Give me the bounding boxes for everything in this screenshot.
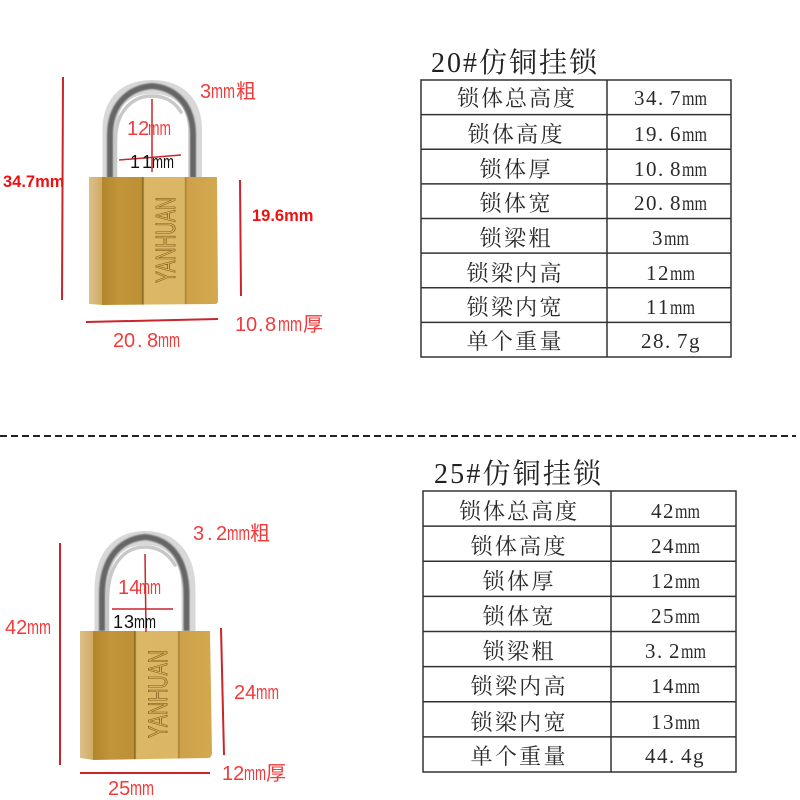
spec table: 20#: mm [682, 157, 707, 181]
body height line [221, 628, 224, 755]
width label: 20.8 [113, 330, 158, 352]
body height label: mm [256, 682, 279, 704]
shackle [102, 537, 188, 631]
thickness label: 10.8 [235, 314, 276, 336]
inner width label: 13 [113, 612, 134, 632]
spec table: 25#: 锁梁粗 [482, 639, 554, 664]
body height label: 24 [234, 682, 256, 704]
section title: 20#: 20#仿铜挂锁 [431, 47, 598, 79]
spec table: 20#: 锁梁粗 [480, 226, 550, 251]
width line [86, 319, 218, 322]
spec table: 20#: 19.6 [634, 122, 680, 146]
shackle [110, 86, 195, 178]
shackle thickness label: 粗 [250, 522, 270, 545]
spec table: 25#: mm [675, 499, 700, 523]
spec table: 20#: mm [670, 295, 695, 319]
inner height label: mm [139, 577, 161, 599]
spec table: 25# [423, 491, 736, 772]
spec table: 25#: 锁梁内宽 [470, 710, 566, 735]
total height label: 34.7mm [3, 173, 64, 191]
spec table: 20#: 3 [652, 226, 662, 250]
spec table: 25#: mm [675, 604, 700, 628]
thickness label: mm [244, 763, 266, 785]
spec table: 25#: mm [681, 639, 706, 663]
spec table: 25#: mm [675, 710, 700, 734]
spec table: 25#: 14 [651, 674, 674, 698]
shackle thickness label: mm [211, 81, 235, 103]
spec table: 20#: 28.7g [641, 329, 700, 353]
spec table: 25#: 25 [651, 604, 674, 628]
spec table: 20#: mm [682, 86, 707, 110]
spec table: 20#: 锁体总高度 [457, 86, 575, 111]
spec table: 25#: 锁体厚 [482, 569, 554, 594]
shackle thickness label: 3.2 [193, 523, 227, 545]
thickness label: 厚 [266, 763, 286, 785]
inner width line [112, 608, 173, 610]
spec table: 20#: 锁梁内高 [466, 261, 562, 286]
spec table: 20#: mm [664, 226, 689, 250]
width label: 25 [108, 778, 130, 800]
spec table: 20#: mm [682, 191, 707, 215]
spec table: 20#: 单个重量 [466, 329, 562, 354]
spec table: 20#: 11 [646, 295, 668, 319]
spec table: 25#: 44.4g [645, 744, 704, 768]
spec table: 25#: 12 [651, 569, 674, 593]
spec table: 20#: 34.7 [634, 86, 680, 110]
shackle thickness label: 粗 [236, 80, 256, 103]
spec table: 25#: 单个重量 [470, 744, 566, 769]
inner height label: 12 [127, 118, 149, 140]
inner width label: mm [152, 152, 174, 172]
spec table: 20#: 锁体厚 [480, 157, 550, 182]
spec table: 25#: 锁梁内高 [470, 674, 566, 699]
inner width line [119, 155, 181, 160]
brand text: YANHUAN [150, 197, 181, 283]
spec table: 25#: 42 [651, 499, 674, 523]
width label: mm [158, 330, 180, 352]
body height line [240, 180, 241, 296]
spec table: 20#: 锁体高度 [468, 122, 562, 147]
spec table: 25#: 13 [651, 710, 674, 734]
spec table: 25#: 锁体高度 [470, 534, 566, 559]
inner height label: mm [148, 118, 171, 140]
spec table: 20#: 20.8 [634, 191, 680, 215]
width line [80, 772, 210, 774]
spec table: 25#: mm [675, 674, 700, 698]
lock body front [93, 631, 212, 760]
width label: mm [130, 778, 154, 800]
brand text: YANHUAN [143, 650, 173, 738]
thickness label: mm [278, 314, 302, 336]
spec table: 20#: mm [682, 122, 707, 146]
lock photo: 20# padlock [89, 86, 218, 305]
dimension annotations: 25# padlock [5, 522, 286, 800]
thickness label: 12 [222, 763, 244, 785]
total height line [62, 77, 63, 300]
spec table: 20#: 10.8 [634, 157, 680, 181]
inner height line [151, 99, 153, 172]
spec table: 25#: 24 [651, 534, 674, 558]
lock body side [89, 177, 103, 305]
lock body side [80, 631, 94, 760]
spec table: 25#: mm [675, 534, 700, 558]
spec table: 25#: 3.2 [645, 639, 680, 663]
dimension annotations: 20# padlock [3, 77, 323, 352]
shackle thickness label: mm [227, 523, 250, 545]
total height line [59, 543, 61, 765]
lock body front [102, 177, 218, 305]
inner height line [145, 554, 146, 632]
spec table: 20#: 锁梁内宽 [466, 295, 562, 320]
inner height label: 14 [118, 577, 140, 599]
spec table: 20#: 锁体宽 [480, 191, 550, 216]
spec table: 20# [421, 80, 731, 357]
spec table: 20#: mm [670, 261, 695, 285]
total height label: 42 [5, 617, 27, 639]
spec table: 25#: mm [675, 569, 700, 593]
spec table: 20#: 12 [646, 261, 668, 285]
inner width label: mm [134, 612, 156, 632]
total height label: mm [27, 617, 51, 639]
spec table: 25#: 锁体总高度 [459, 499, 577, 524]
shackle thickness label: 3 [200, 81, 211, 103]
lock photo: 25# padlock [80, 537, 212, 760]
inner width label: 11 [130, 152, 152, 172]
spec table: 25#: 锁体宽 [482, 604, 554, 629]
thickness label: 厚 [303, 314, 323, 336]
body height label: 19.6mm [252, 207, 313, 225]
section title: 25#: 25#仿铜挂锁 [434, 458, 602, 490]
